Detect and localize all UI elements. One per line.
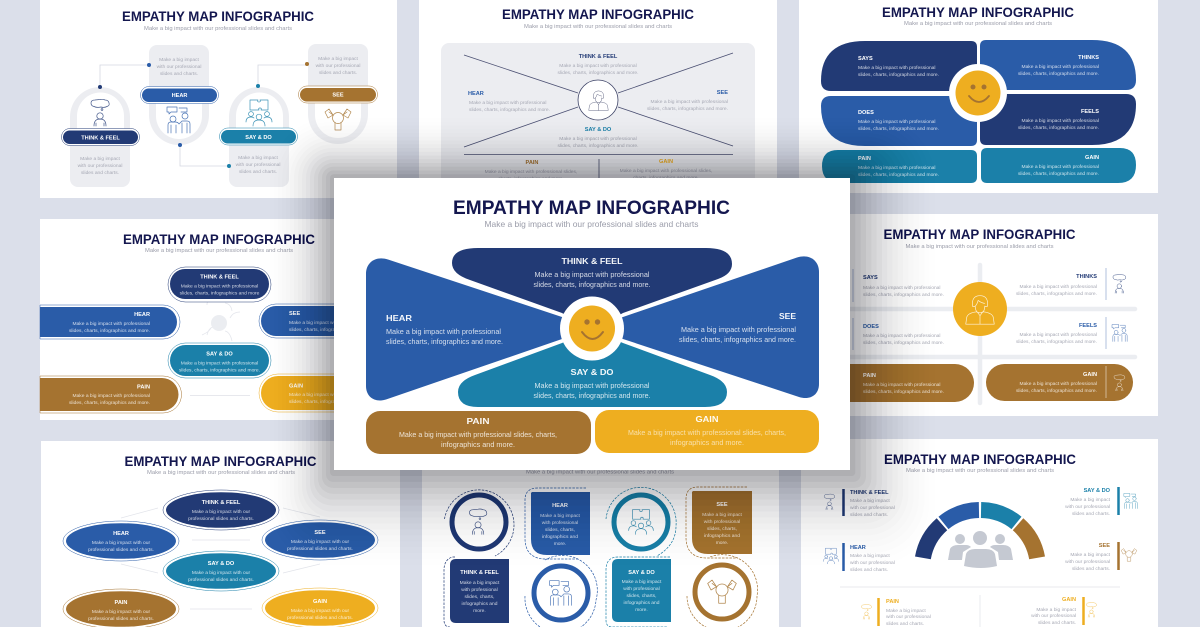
panel: thinks — [980, 40, 1136, 90]
ellipse: pain: professional slides and charts. — [88, 616, 154, 622]
ellipse: see: Make a big impact with our — [291, 539, 349, 545]
ellipse: gain: GAIN — [313, 599, 327, 605]
pill: think and feel: slides, charts, infographics and more — [180, 290, 260, 296]
text: pain: slides and charts. — [886, 621, 924, 627]
panel: gain: slides, charts, infographics and more. — [1018, 171, 1099, 177]
text: pain — [878, 598, 931, 627]
pill: gain — [259, 374, 370, 412]
card: say and do: SAY & DO — [628, 570, 655, 576]
ellipse: say and do — [163, 551, 279, 591]
text: see: slides, charts, infographics and more. — [647, 106, 728, 112]
pill: gain: GAIN — [289, 384, 303, 390]
ellipse: pain: PAIN — [115, 600, 127, 606]
text: gain: charts, infographics and more. — [633, 175, 699, 181]
icon: thinks — [1113, 274, 1126, 293]
text: hear: with our professional — [850, 560, 895, 566]
ring: navy with icon — [452, 495, 506, 549]
ellipse: say and do: Make a big impact with our — [192, 570, 250, 576]
panel: does: DOES — [858, 110, 874, 116]
subtitle: Make a big impact with our professional slides and charts — [145, 248, 293, 254]
pill: say and do: slides, charts, infographics and more. — [179, 368, 260, 374]
card: think and feel: with our professional — [78, 163, 122, 169]
cross lines — [464, 53, 733, 190]
text: say and do: Make a big impact with professional — [559, 136, 637, 142]
text: say and do: Make a big impact — [1070, 497, 1111, 503]
pill: say and do — [168, 343, 271, 378]
ellipse: say and do: SAY & DO — [208, 561, 235, 567]
text: think and feel: Make a big impact with professional — [559, 63, 637, 69]
text: says: SAYS — [863, 275, 878, 281]
subtitle: Make a big impact with our professional slides and charts — [144, 26, 292, 32]
pill: hear: slides, charts, infographics and more. — [69, 328, 150, 334]
text: feels — [1016, 323, 1097, 345]
text: feels: FEELS — [1079, 323, 1097, 329]
icon: people talking — [167, 107, 190, 133]
title: EMPATHY MAP INFOGRAPHIC — [882, 5, 1074, 20]
text: gain: GAIN — [659, 159, 673, 165]
text: says: slides, charts, infographics and more. — [863, 292, 944, 298]
text: see: with our professional — [1065, 559, 1110, 565]
card: see: slides, charts, — [707, 526, 737, 532]
panel: gain: Make a big impact with professional — [1022, 164, 1099, 170]
text: see: Make a big impact with professional — [651, 99, 728, 105]
panel: pain: slides, charts, infographics and more. — [863, 389, 944, 395]
pill: see — [259, 304, 370, 338]
card: think and feel: THINK & FEEL — [81, 136, 120, 142]
card: see: SEE — [716, 502, 728, 508]
slide: grid middle right — [820, 214, 1158, 416]
panel: gain: GAIN — [696, 414, 718, 424]
card: see: more. — [716, 540, 728, 546]
panel: says — [821, 41, 977, 91]
card: see — [298, 44, 378, 144]
card: hear: slides, charts, — [545, 527, 575, 533]
ellipse: see: SEE — [314, 530, 326, 536]
card: say and do — [220, 87, 298, 187]
icon: thought person — [91, 99, 109, 126]
card: think and feel: slides and charts. — [81, 170, 119, 176]
card: say and do: SAY & DO — [245, 135, 272, 141]
panel: hear: Make a big impact with professional — [386, 328, 501, 336]
panel: gain: Make a big impact with professional — [1020, 381, 1097, 387]
ring: blue with icon — [534, 566, 588, 620]
ellipse: pain: Make a big impact with our — [92, 609, 150, 615]
card: say and do: with our professional — [236, 162, 280, 168]
slide: semicircle bottom right — [801, 439, 1158, 627]
connector dots — [98, 62, 309, 168]
ellipse: hear: professional slides and charts. — [88, 547, 154, 553]
icon: hear — [823, 548, 839, 564]
card: see: SEE — [332, 92, 344, 98]
card: think and feel: Make a big impact — [80, 156, 120, 162]
subtitle: Make a big impact with our professional slides and charts — [147, 470, 295, 476]
card: hear — [140, 45, 218, 145]
pill: say and do: Make a big impact with professional — [181, 360, 258, 366]
ellipse: gain: Make a big impact with our — [291, 608, 349, 614]
text: gain: with our professional — [1031, 613, 1076, 619]
chart: semicircle — [915, 502, 1045, 559]
text: does: DOES — [863, 324, 879, 330]
text: does: slides, charts, infographics and more. — [863, 340, 944, 346]
text: see — [1065, 542, 1118, 572]
text: think and feel: Make a big impact — [850, 498, 890, 504]
card: think and feel: more. — [473, 608, 486, 614]
ellipse: see: professional slides and charts. — [287, 546, 353, 552]
card: think and feel: with professional — [461, 587, 498, 593]
card: say and do — [612, 559, 671, 622]
text: does: Make a big impact with professional — [863, 333, 940, 339]
text: think and feel: with our professional — [850, 505, 895, 511]
text: feels: Make a big impact with professional — [1020, 332, 1097, 338]
card: hear: infographics and — [542, 534, 578, 540]
hub with spokes — [202, 296, 240, 341]
title: EMPATHY MAP INFOGRAPHIC — [884, 452, 1076, 467]
main subtitle: Make a big impact with our professional slides and charts — [484, 220, 698, 229]
text: think and feel: THINK & FEEL — [579, 54, 618, 60]
panel: see: Make a big impact with professional — [681, 326, 796, 334]
slide: ellipses bottom left — [41, 441, 400, 627]
card: hear — [531, 492, 590, 555]
grey panel — [441, 43, 755, 203]
card: think and feel — [450, 559, 509, 623]
pill: see: SEE — [289, 311, 300, 317]
panel: see: slides, charts, infographics and more. — [679, 336, 796, 344]
icon: think — [824, 494, 835, 510]
text: thinks — [1016, 274, 1097, 297]
pill: hear: HEAR — [134, 312, 150, 318]
text: says: Make a big impact with professional — [863, 285, 940, 291]
card: hear: HEAR — [552, 503, 568, 509]
panel: gain: GAIN — [1083, 372, 1097, 378]
text: says — [863, 275, 944, 298]
text: thinks: slides, charts, infographics and more. — [1016, 291, 1097, 297]
panel: pain: PAIN — [863, 373, 876, 379]
panel: hear: HEAR — [386, 313, 413, 323]
ellipse: hear: Make a big impact with our — [92, 540, 150, 546]
panel: does: slides, charts, infographics and more. — [858, 126, 939, 132]
ring: teal with icon — [614, 495, 668, 549]
panel: pain — [820, 364, 974, 402]
slide: four petals top right — [799, 0, 1158, 193]
text: say and do — [1065, 487, 1118, 517]
ellipse: think and feel: THINK & FEEL — [202, 500, 241, 506]
panel: think and feel: Make a big impact with professional — [534, 271, 650, 279]
pill: pain: Make a big impact with professional — [73, 393, 150, 399]
card: see: Make a big impact — [702, 512, 742, 518]
panel: feels: FEELS — [1081, 109, 1099, 115]
slide: arch cards top left — [40, 0, 397, 198]
text: hear: Make a big impact — [850, 553, 890, 559]
text: say and do: SAY & DO — [1084, 488, 1111, 494]
text: does — [863, 324, 944, 346]
text: hear: HEAR — [850, 545, 866, 551]
text: gain: Make a big impact with professional slides, — [620, 168, 712, 174]
text: see: slides and charts. — [1072, 566, 1110, 572]
ellipse: think and feel: professional slides and charts. — [188, 516, 254, 522]
ellipse: hear — [63, 521, 179, 561]
text: hear — [844, 543, 895, 573]
ellipse: think and feel — [163, 490, 279, 530]
panel: says: slides, charts, infographics and more. — [858, 72, 939, 78]
text: say and do: slides and charts. — [1072, 511, 1110, 517]
text: pain — [485, 160, 577, 182]
panel: say and do: SAY & DO — [570, 367, 614, 377]
icon: gain — [1086, 602, 1097, 617]
panel: gain — [981, 148, 1136, 183]
title: EMPATHY MAP INFOGRAPHIC — [122, 9, 314, 24]
card: hear: with professional — [542, 520, 578, 526]
icon: say and do — [1124, 493, 1137, 509]
panel: says: Make a big impact with professional — [858, 65, 935, 71]
panel: feels: slides, charts, infographics and more. — [1018, 125, 1099, 131]
icon: feels — [1112, 325, 1127, 341]
text: gain — [620, 159, 712, 181]
text: gain — [1031, 597, 1084, 626]
icon: smiley — [560, 296, 624, 360]
pill: gain: slides, charts, infographics and more. — [289, 399, 370, 405]
ellipse: pain — [63, 589, 179, 627]
card: see: with our professional — [316, 63, 360, 69]
card: see: with professional — [704, 519, 740, 525]
card: say and do: slides, charts, — [627, 593, 656, 599]
panel: think and feel: slides, charts, infographics and more. — [534, 281, 651, 289]
panel: say and do: Make a big impact with professional — [534, 382, 650, 390]
subtitle: Make a big impact with our professional slides and charts — [904, 21, 1052, 27]
ring: brown with icon — [695, 565, 749, 619]
pill: see: slides, charts, infographics and more. — [289, 327, 370, 333]
panel: pain — [366, 411, 591, 454]
card: see: infographics and — [704, 533, 740, 539]
panel: see — [594, 256, 819, 398]
panel: thinks: THINKS — [1078, 55, 1099, 61]
panel: pain: infographics and more. — [441, 441, 515, 449]
panel: gain: slides, charts, infographics and more. — [1016, 388, 1097, 394]
text: pain: PAIN — [526, 160, 538, 166]
panel: pain: Make a big impact with professional slides, charts, — [399, 431, 557, 439]
text: see — [647, 90, 728, 112]
panel: say and do: slides, charts, infographics and more. — [534, 392, 651, 400]
subtitle: Make a big impact with our professional slides and charts — [906, 244, 1054, 250]
panel: gain — [595, 410, 819, 453]
main title: EMPATHY MAP INFOGRAPHIC — [453, 198, 730, 219]
pill: hear: Make a big impact with professional — [73, 321, 150, 327]
pill: pain — [40, 376, 182, 413]
title: EMPATHY MAP INFOGRAPHIC — [884, 227, 1076, 242]
panel: gain: infographics and more. — [670, 439, 744, 447]
connector lines — [100, 65, 307, 166]
main slide: bow-tie empathy map — [334, 178, 850, 470]
pill: think and feel — [168, 267, 271, 302]
icon: group of people — [948, 531, 1013, 568]
slide: crossed lines top centre — [419, 0, 777, 203]
icon: puzzle group — [246, 100, 272, 126]
card: hear: more. — [554, 541, 566, 547]
panel: pain: Make a big impact with professional — [863, 382, 940, 388]
subtitle: Make a big impact with our professional slides and charts — [526, 470, 674, 476]
text: gain: Make a big impact — [1036, 607, 1077, 613]
text: think and feel: slides and charts. — [850, 512, 888, 518]
connector lines — [121, 508, 320, 609]
card: think and feel: slides, charts, — [465, 594, 494, 600]
card: say and do: Make a big impact — [622, 579, 662, 585]
ellipse: think and feel: Make a big impact with our — [192, 509, 250, 515]
ellipse: gain: professional slides and charts. — [287, 615, 353, 621]
card: say and do: more. — [635, 607, 648, 613]
circle with person — [953, 282, 1007, 336]
text: say and do: slides, charts, infographics and more. — [557, 143, 639, 149]
text: think and feel — [844, 489, 895, 518]
subtitle: Make a big impact with our professional slides and charts — [906, 468, 1054, 474]
card: say and do: with professional — [623, 586, 660, 592]
divider — [190, 394, 250, 396]
panel: pain — [822, 150, 977, 183]
text: say and do — [557, 127, 639, 149]
panel: think and feel — [452, 248, 732, 330]
pill: think and feel: THINK & FEEL — [200, 274, 239, 280]
text: think and feel: slides, charts, infographics and more. — [557, 70, 639, 76]
panel: says: SAYS — [858, 56, 873, 62]
grid bars — [825, 265, 1135, 403]
icon: see — [1121, 549, 1137, 561]
text: pain: PAIN — [886, 599, 899, 605]
ellipse: say and do: professional slides and charts. — [188, 577, 254, 583]
text: pain: with our professional — [886, 614, 931, 620]
card: think and feel: THINK & FEEL — [460, 570, 499, 576]
text: hear — [468, 91, 550, 113]
panel: feels: Make a big impact with professional — [1022, 118, 1099, 124]
shadow of main slide — [270, 118, 935, 565]
panel: pain: PAIN — [858, 156, 871, 162]
subtitle: Make a big impact with our professional slides and charts — [524, 24, 672, 30]
panel: does: Make a big impact with professional — [858, 119, 935, 125]
text: see: SEE — [717, 90, 728, 96]
card: hear: Make a big impact — [540, 513, 580, 519]
icon: smiley — [949, 64, 1007, 122]
card: hear: Make a big impact — [159, 57, 199, 63]
text: say and do: with our professional — [1065, 504, 1110, 510]
text: hear: Make a big impact with professional — [469, 100, 546, 106]
dashed outlines — [444, 487, 758, 627]
icon: three lobes — [325, 109, 351, 130]
card: see: slides and charts. — [319, 70, 357, 76]
card: see: Make a big impact — [318, 56, 358, 62]
slide: pills middle left — [40, 219, 370, 420]
panel: say and do — [458, 330, 727, 407]
panel: see: SEE — [779, 311, 796, 321]
panel: thinks: Make a big impact with professional — [1022, 64, 1099, 70]
text: thinks: THINKS — [1076, 274, 1097, 280]
card: think and feel: infographics and — [462, 601, 498, 607]
text: think and feel: THINK & FEEL — [850, 490, 889, 496]
dividers — [840, 587, 1120, 627]
card: think and feel — [62, 87, 140, 187]
icon: pain — [862, 604, 872, 619]
pill: think and feel: Make a big impact with professional — [181, 284, 258, 290]
text: see: SEE — [1099, 543, 1110, 549]
text: gain: GAIN — [1062, 597, 1076, 603]
panel: gain: Make a big impact with professional slides, charts, — [628, 429, 786, 437]
dividers — [853, 268, 1106, 350]
text: thinks: Make a big impact with professional — [1020, 284, 1097, 290]
panel: pain: PAIN — [466, 416, 490, 426]
card: hear: with our professional — [157, 64, 201, 70]
text: pain: Make a big impact — [886, 608, 926, 614]
panel: pain: Make a big impact with professional — [858, 165, 935, 171]
ellipse: hear: HEAR — [113, 531, 129, 537]
text: pain: Make a big impact with professional slides, — [485, 169, 577, 175]
pill: pain: PAIN — [137, 384, 150, 390]
pill: say and do: SAY & DO — [206, 352, 233, 358]
panel: gain — [986, 364, 1133, 401]
card: see — [692, 491, 752, 554]
panel: pain: slides, charts, infographics and more. — [858, 172, 939, 178]
card: say and do: infographics and — [624, 600, 660, 606]
title: EMPATHY MAP INFOGRAPHIC — [124, 454, 317, 469]
card: say and do: slides and charts. — [239, 169, 277, 175]
pill: see: Make a big impact with professional — [289, 320, 366, 326]
text: pain: charts, infographics and more. — [498, 176, 564, 182]
text: hear: HEAR — [468, 91, 484, 97]
text: say and do: SAY & DO — [585, 127, 612, 133]
text: hear: slides and charts. — [850, 567, 888, 573]
pill: pain: slides, charts, infographics and more. — [69, 400, 150, 406]
centre circle with person — [578, 80, 618, 120]
title: EMPATHY MAP INFOGRAPHIC — [502, 7, 694, 22]
panel: hear — [366, 258, 590, 400]
text: gain: slides and charts. — [1038, 620, 1076, 626]
panel: think and feel: THINK & FEEL — [562, 256, 622, 266]
pill: gain: Make a big impact with professional — [289, 392, 366, 398]
card: hear: slides and charts. — [160, 71, 198, 77]
title: EMPATHY MAP INFOGRAPHIC — [123, 232, 315, 247]
pill: hear — [40, 305, 180, 339]
panel: gain: GAIN — [1085, 155, 1099, 161]
card: think and feel: Make a big impact — [460, 580, 500, 586]
panel: thinks: slides, charts, infographics and more. — [1018, 71, 1099, 77]
panel: does — [821, 96, 977, 146]
panel: feels — [980, 94, 1136, 145]
text: see: Make a big impact — [1070, 552, 1111, 558]
ellipse: gain — [262, 588, 378, 627]
text: think and feel — [557, 54, 639, 76]
panel: hear: slides, charts, infographics and more. — [386, 338, 503, 346]
slide: rings and squares bottom centre — [422, 440, 779, 627]
text: hear: slides, charts, infographics and more. — [469, 107, 550, 113]
card: hear: HEAR — [172, 93, 187, 99]
ellipse: see — [262, 520, 378, 560]
text: feels: slides, charts, infographics and more. — [1016, 339, 1097, 345]
card: say and do: Make a big impact — [238, 155, 278, 161]
